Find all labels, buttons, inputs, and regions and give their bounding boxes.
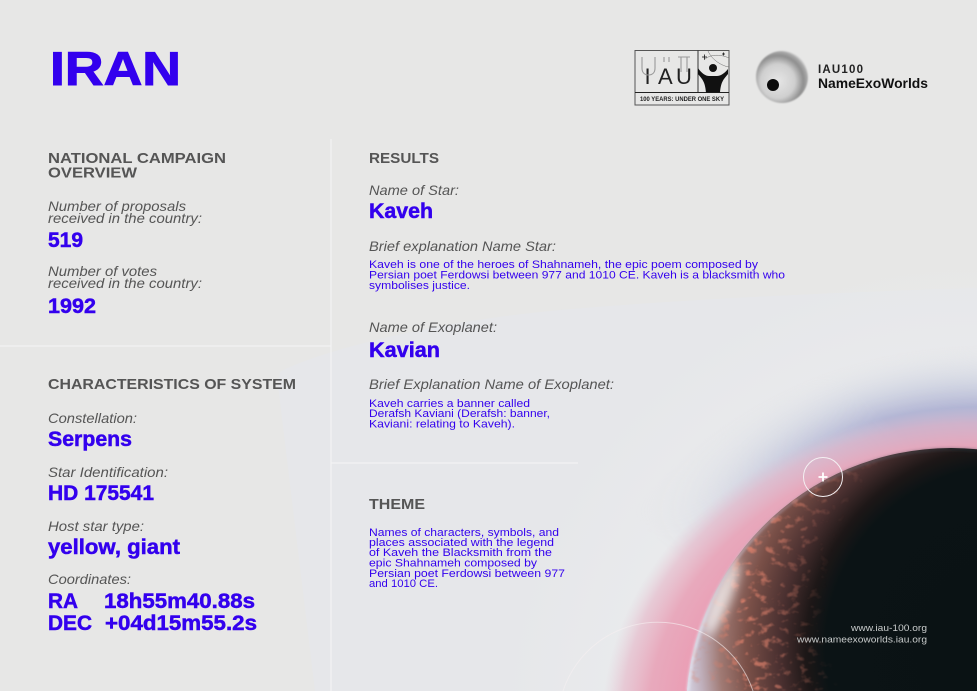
proposals label: received in the country: xyxy=(48,210,202,226)
exoplanet explanation text: Derafsh Kaviani (Derafsh: banner, xyxy=(369,408,550,420)
logo: IAU 100 years: 100 YEARS: UNDER ONE SKY xyxy=(640,96,725,103)
proposals label xyxy=(48,198,202,226)
constellation label: Constellation: xyxy=(48,410,137,426)
theme text: epic Shahnameh composed by xyxy=(369,558,538,570)
planet glow xyxy=(612,369,977,691)
star name: Kaveh xyxy=(369,200,433,223)
outlined trident marks xyxy=(642,57,690,75)
proposals label: Number of proposals xyxy=(48,198,186,214)
lighter background area xyxy=(278,288,977,691)
exoplanet explanation text xyxy=(369,398,550,430)
coordinates label: Coordinates: xyxy=(48,571,131,587)
website links: www.nameexoworlds.iau.org xyxy=(796,634,927,646)
heading: CHARACTERISTICS OF SYSTEM xyxy=(48,376,296,393)
theme text: Names of characters, symbols, and xyxy=(369,527,559,539)
star identification label: Star Identification: xyxy=(48,464,168,480)
star explanation text: Kaveh is one of the heroes of Shahnameh, the epic poem composed by xyxy=(369,259,759,271)
votes value: 1992 xyxy=(48,295,96,318)
IAU lettering: IAU xyxy=(644,64,692,89)
panel: theme xyxy=(369,496,565,590)
constellation value: Serpens xyxy=(48,428,132,451)
figure with raised arms xyxy=(698,51,729,92)
votes label xyxy=(48,263,202,291)
logo: NameExoWorlds: IAU100 xyxy=(818,64,863,76)
theme text xyxy=(369,527,565,590)
website links xyxy=(796,623,927,646)
panel: national campaign overview xyxy=(48,150,226,318)
theme text: of Kaveh the Blacksmith from the xyxy=(369,547,552,559)
declination: DEC xyxy=(48,612,92,635)
logo: NameExoWorlds xyxy=(756,51,928,103)
website links: www.iau-100.org xyxy=(850,623,927,634)
heading: OVERVIEW xyxy=(48,164,138,182)
votes label: Number of votes xyxy=(48,263,157,279)
theme text: Persian poet Ferdowsi between 977 xyxy=(369,568,565,580)
proposals value: 519 xyxy=(48,229,83,252)
heading: NATIONAL CAMPAIGN xyxy=(48,150,226,167)
plus marker xyxy=(804,458,842,496)
votes label: received in the country: xyxy=(48,275,202,291)
star explanation text xyxy=(369,259,785,292)
heading: THEME xyxy=(369,496,425,513)
exoplanet explanation text: Kaviani: relating to Kaveh). xyxy=(369,418,515,430)
right ascension: 18h55m40.88s xyxy=(104,590,255,613)
theme text: and 1010 CE. xyxy=(369,578,438,590)
declination xyxy=(48,612,257,635)
logo: NameExoWorlds: NameExoWorlds xyxy=(818,76,928,91)
star explanation label: Brief explanation Name Star: xyxy=(369,238,556,254)
heading: RESULTS xyxy=(369,150,439,167)
star name label: Name of Star: xyxy=(369,182,459,198)
decorative orbit arc xyxy=(563,622,753,691)
exoplanet explanation label: Brief Explanation Name of Exoplanet: xyxy=(369,376,614,392)
theme text: places associated with the legend xyxy=(369,537,554,549)
star explanation text: Persian poet Ferdowsi between 977 and 1010 CE. Kaveh is a blacksmith who xyxy=(369,270,785,282)
divider lines xyxy=(0,139,578,691)
sphere icon xyxy=(756,51,808,103)
host star type value: yellow, giant xyxy=(48,536,180,559)
exoplanet name: Kavian xyxy=(369,339,440,362)
logo: IAU 100 years xyxy=(635,50,729,105)
planet xyxy=(680,445,977,691)
right ascension: RA xyxy=(48,590,78,613)
heading xyxy=(48,150,226,182)
host star type label: Host star type: xyxy=(48,518,144,534)
exoplanet explanation text: Kaveh carries a banner called xyxy=(369,398,530,410)
star explanation text: symbolises justice. xyxy=(369,280,470,292)
panel: characteristics of system xyxy=(48,376,296,635)
star identification value: HD 175541 xyxy=(48,482,154,505)
title: IRAN xyxy=(50,42,181,95)
declination: +04d15m55.2s xyxy=(105,612,257,635)
exoplanet name label: Name of Exoplanet: xyxy=(369,319,497,335)
panel: results xyxy=(369,150,785,430)
right ascension xyxy=(48,590,255,613)
